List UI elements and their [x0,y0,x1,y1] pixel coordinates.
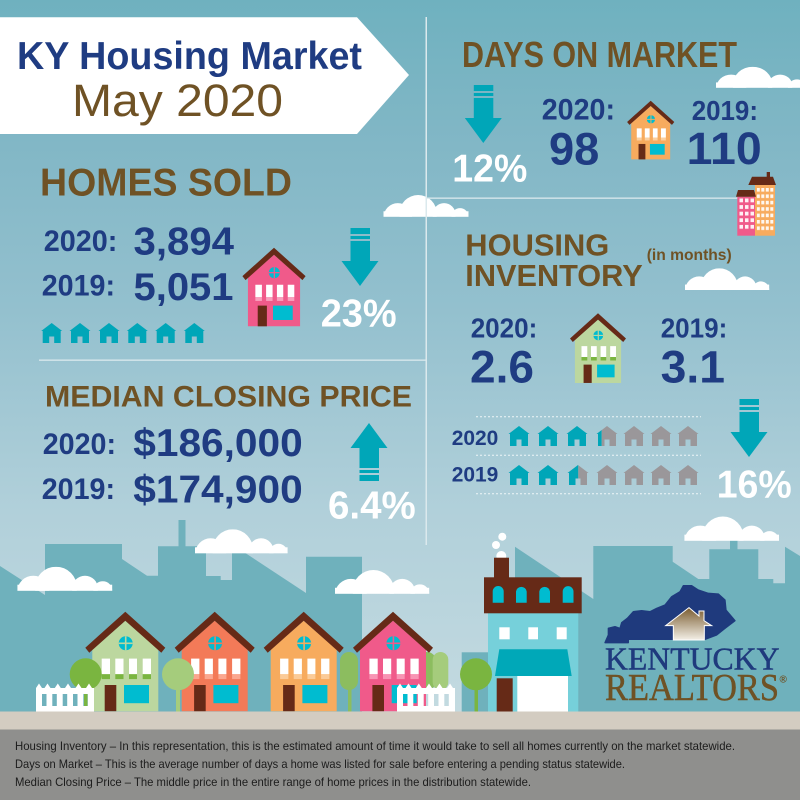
panel: housing inventory [452,228,792,506]
arrow: down [730,399,768,457]
2020 value [470,312,537,393]
icon row: small houses [41,323,205,343]
icon: pink house [242,248,306,326]
2019 value [687,95,762,174]
tree: tall right dark [418,652,436,690]
wordmark: Realtors: REALTORS [605,667,779,709]
street of houses [36,612,455,712]
tree: light green [162,658,194,712]
change: 23%: 23% [321,293,397,336]
panel: median closing price [42,381,416,527]
2020 value: 3,894 [134,220,234,263]
footer panel [0,730,800,800]
row icons 2019 [508,465,698,485]
heading: DAYS ON MARKET [462,34,737,75]
wordmark: Kentucky: KENTUCKY [605,640,780,676]
row icons 2020 [508,426,698,446]
tree: tall [340,652,358,712]
2020 value: $186,000 [133,422,303,465]
row label 2019: 2019 [452,464,498,487]
definition: days on market: Days on Market – This is the average number of days a home was listed for sale before entering a pending status statewide. [15,757,625,771]
arrow: down [342,228,378,286]
smoke [492,533,506,561]
house: orange [264,612,344,711]
change: 12%: 12% [452,148,527,191]
registered mark: ® [780,674,788,686]
2020 value: 2020: [542,93,615,126]
2019 value: $174,900 [133,468,303,511]
2020 value: 2020: [44,225,117,258]
title banner [0,17,409,134]
panel: homes sold [40,162,397,343]
unit note: (in months) [647,247,732,264]
icon: orange house [627,101,674,159]
skyline right [515,540,800,712]
clouds [17,67,800,611]
2019 value: 2019: [42,473,115,506]
house: pink [353,612,433,711]
heading: MEDIAN CLOSING PRICE [45,381,412,414]
2019 value: 5,051 [134,266,234,309]
2020 value: 98 [549,123,599,174]
2020 value: 2020: [471,312,537,343]
2019 value: 110 [687,123,762,174]
arrow: up [350,423,388,481]
row label 2020: 2020 [452,427,498,450]
tree: by shop [460,658,492,712]
skyline left [0,520,362,712]
icon: Kentucky map with house [605,586,735,643]
shop building [484,533,582,712]
ground strip [0,712,800,730]
heading: HOMES SOLD [40,162,292,205]
arrow: down [465,85,502,143]
subtitle: May 2020: May 2020 [72,75,283,126]
icon: green house [570,313,626,383]
logo: Kentucky Realtors [605,586,788,709]
icon: apartment buildings [736,172,776,236]
tree: tall right light [433,652,448,712]
2020 value [43,422,303,465]
2019 value [42,468,303,511]
2019 value [661,312,727,392]
title: KY Housing Market: KY Housing Market [17,35,362,78]
tree: round green [70,658,102,712]
change: 16%: 16% [717,463,792,506]
definition: median closing price: Median Closing Price – The middle price in the entire range of home prices in the distribution statewide. [15,775,531,789]
house: green [85,612,165,711]
heading [465,228,643,293]
2019 value: 2019: [692,95,758,126]
heading: HOUSING [465,228,609,263]
fence: right [397,684,455,712]
house: coral [175,612,255,711]
change: 6.4%: 6.4% [328,484,416,527]
2020 value: 2.6 [470,342,534,393]
2019 value: 2019: [42,270,115,303]
definition: housing inventory: Housing Inventory – In this representation, this is the estimated amount of time it would take to sell all homes currently on the market statewide. [15,739,735,753]
2019 value [42,266,234,309]
divider lines [39,17,738,545]
2020 value: 2020: [43,428,116,461]
fence: left [36,684,94,712]
2019 value: 3.1 [661,341,725,392]
icon chart: months of inventory [452,417,701,494]
2019 value: 2019: [661,312,727,343]
panel: days on market [452,34,762,191]
skyline small building [462,652,489,712]
2020 value [542,93,615,174]
2020 value [44,220,234,263]
heading: INVENTORY [465,258,643,293]
